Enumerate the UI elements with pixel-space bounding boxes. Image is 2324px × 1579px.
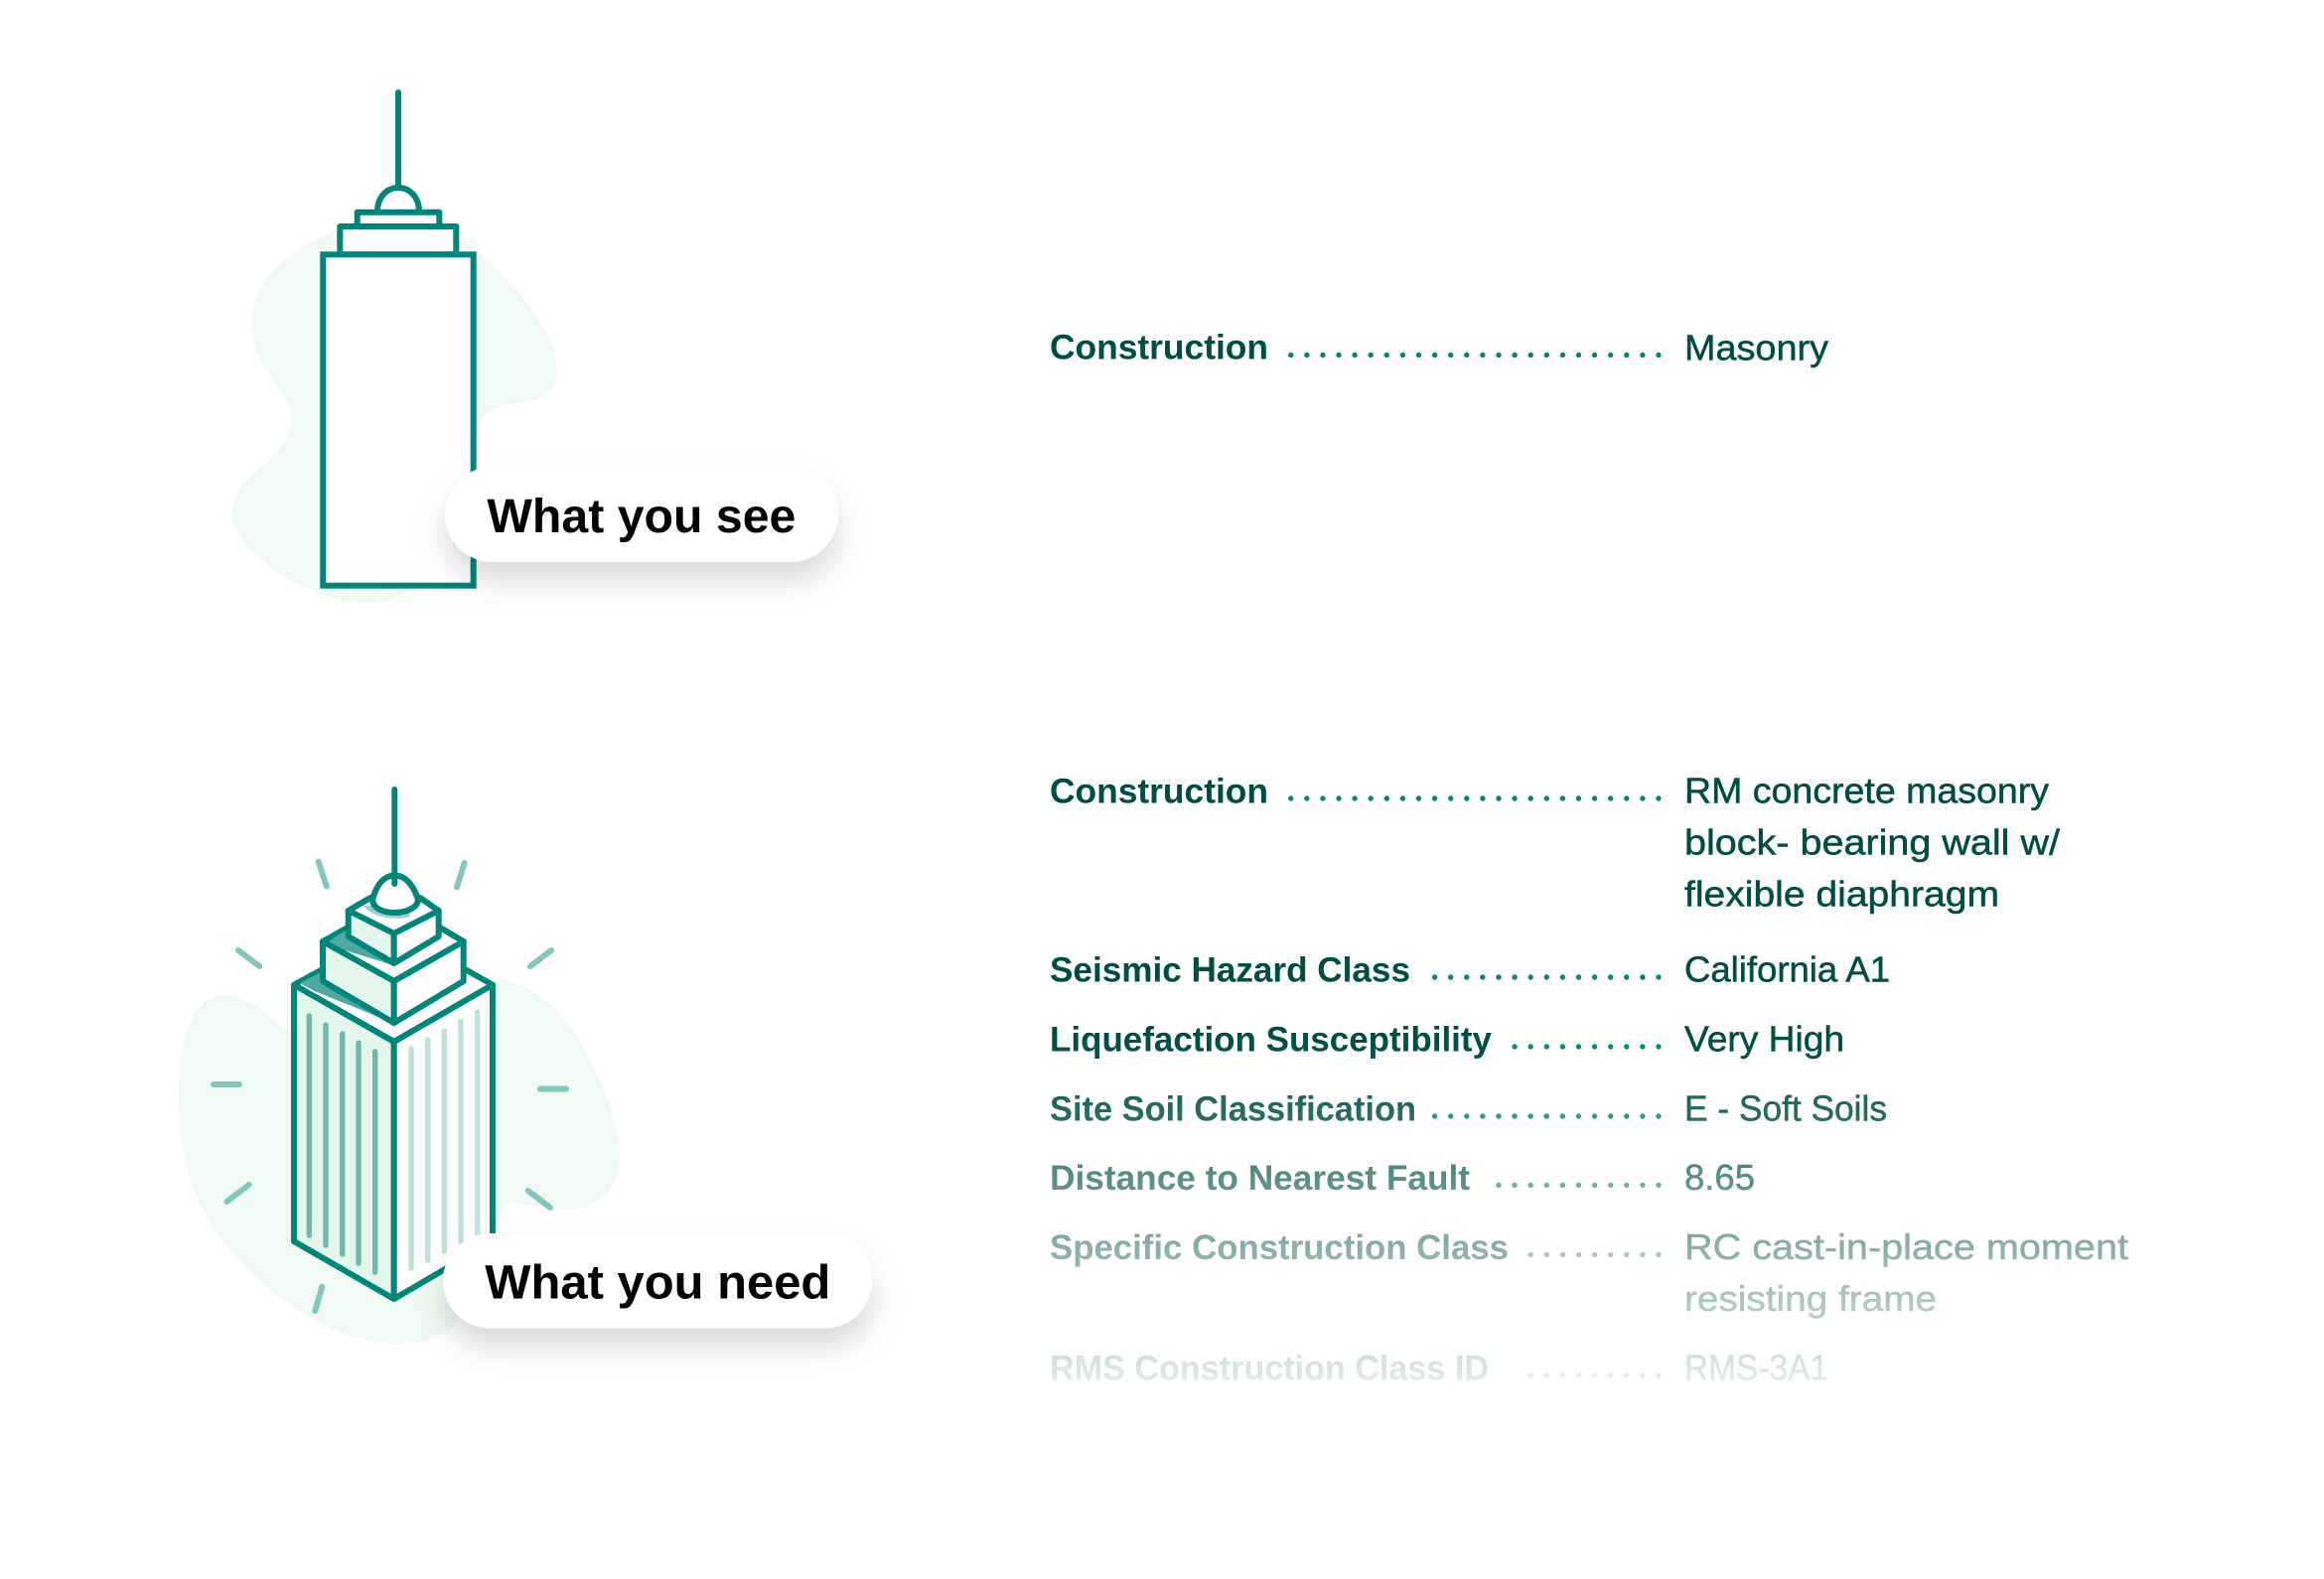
- row: Specific Construction Class: resisting frame: [1684, 1278, 1937, 1319]
- row: Construction: flexible diaphragm: [1684, 873, 1999, 914]
- row: Specific Construction Class: RC cast-in-place moment: [1684, 1226, 2128, 1267]
- row: Construction: [1050, 328, 1828, 368]
- row: Construction: [1050, 770, 2060, 914]
- building dome: [372, 876, 418, 913]
- panel: what you need: [179, 790, 872, 1344]
- row: Construction: Construction: [1050, 329, 1268, 367]
- building middle block: [323, 928, 464, 1023]
- row: Liquefaction Susceptibility: [1050, 1018, 1844, 1059]
- panel: what you see attributes: [1050, 328, 1828, 368]
- row: Seismic Hazard Class: [1050, 948, 1890, 989]
- row: Distance to Nearest Fault: [1050, 1157, 1755, 1198]
- row: Distance to Nearest Fault: 8.65: [1684, 1157, 1755, 1198]
- icon: flat building outline: [323, 92, 474, 586]
- row: Site Soil Classification: E - Soft Soils: [1684, 1087, 1887, 1128]
- label pill: what you see: What you see: [487, 491, 796, 543]
- background blob: what you see: [232, 230, 557, 603]
- row: Liquefaction Susceptibility: Very High: [1684, 1018, 1844, 1059]
- building top block: [349, 898, 439, 963]
- panel: what you see: [232, 92, 838, 603]
- row: Specific Construction Class: [1050, 1226, 2128, 1319]
- label pill: what you see: [445, 467, 838, 562]
- label pill: what you need: [443, 1233, 872, 1329]
- row: Liquefaction Susceptibility: Liquefaction Susceptibility: [1050, 1020, 1493, 1059]
- row: RMS Construction Class ID: RMS Construction Class ID: [1050, 1349, 1489, 1387]
- row: Construction: Masonry: [1684, 328, 1828, 368]
- row: Specific Construction Class: Specific Construction Class: [1050, 1228, 1509, 1267]
- row: Construction: RM concrete masonry: [1684, 770, 2049, 810]
- row: Seismic Hazard Class: California A1: [1684, 948, 1890, 989]
- icon: isometric building: [294, 790, 493, 1299]
- panel: what you need attributes: [1050, 770, 2128, 1387]
- row: Distance to Nearest Fault: Distance to Nearest Fault: [1050, 1159, 1470, 1198]
- row: RMS Construction Class ID: [1050, 1347, 1828, 1387]
- row: RMS Construction Class ID: RMS-3A1: [1684, 1347, 1828, 1387]
- background blob: what you need: [179, 978, 620, 1344]
- building right face stripes: [411, 1012, 478, 1268]
- building left face stripes: [309, 1016, 375, 1272]
- building antenna: [391, 790, 397, 884]
- row: Construction: Construction: [1050, 772, 1268, 810]
- row: Site Soil Classification: Site Soil Classification: [1050, 1089, 1416, 1128]
- label pill: what you need: What you need: [485, 1256, 830, 1309]
- row: Site Soil Classification: [1050, 1087, 1887, 1128]
- row: Seismic Hazard Class: Seismic Hazard Class: [1050, 950, 1410, 989]
- building main block: [294, 970, 493, 1299]
- row: Construction: block- bearing wall w/: [1684, 821, 2060, 862]
- icon: rays around building: [214, 862, 566, 1311]
